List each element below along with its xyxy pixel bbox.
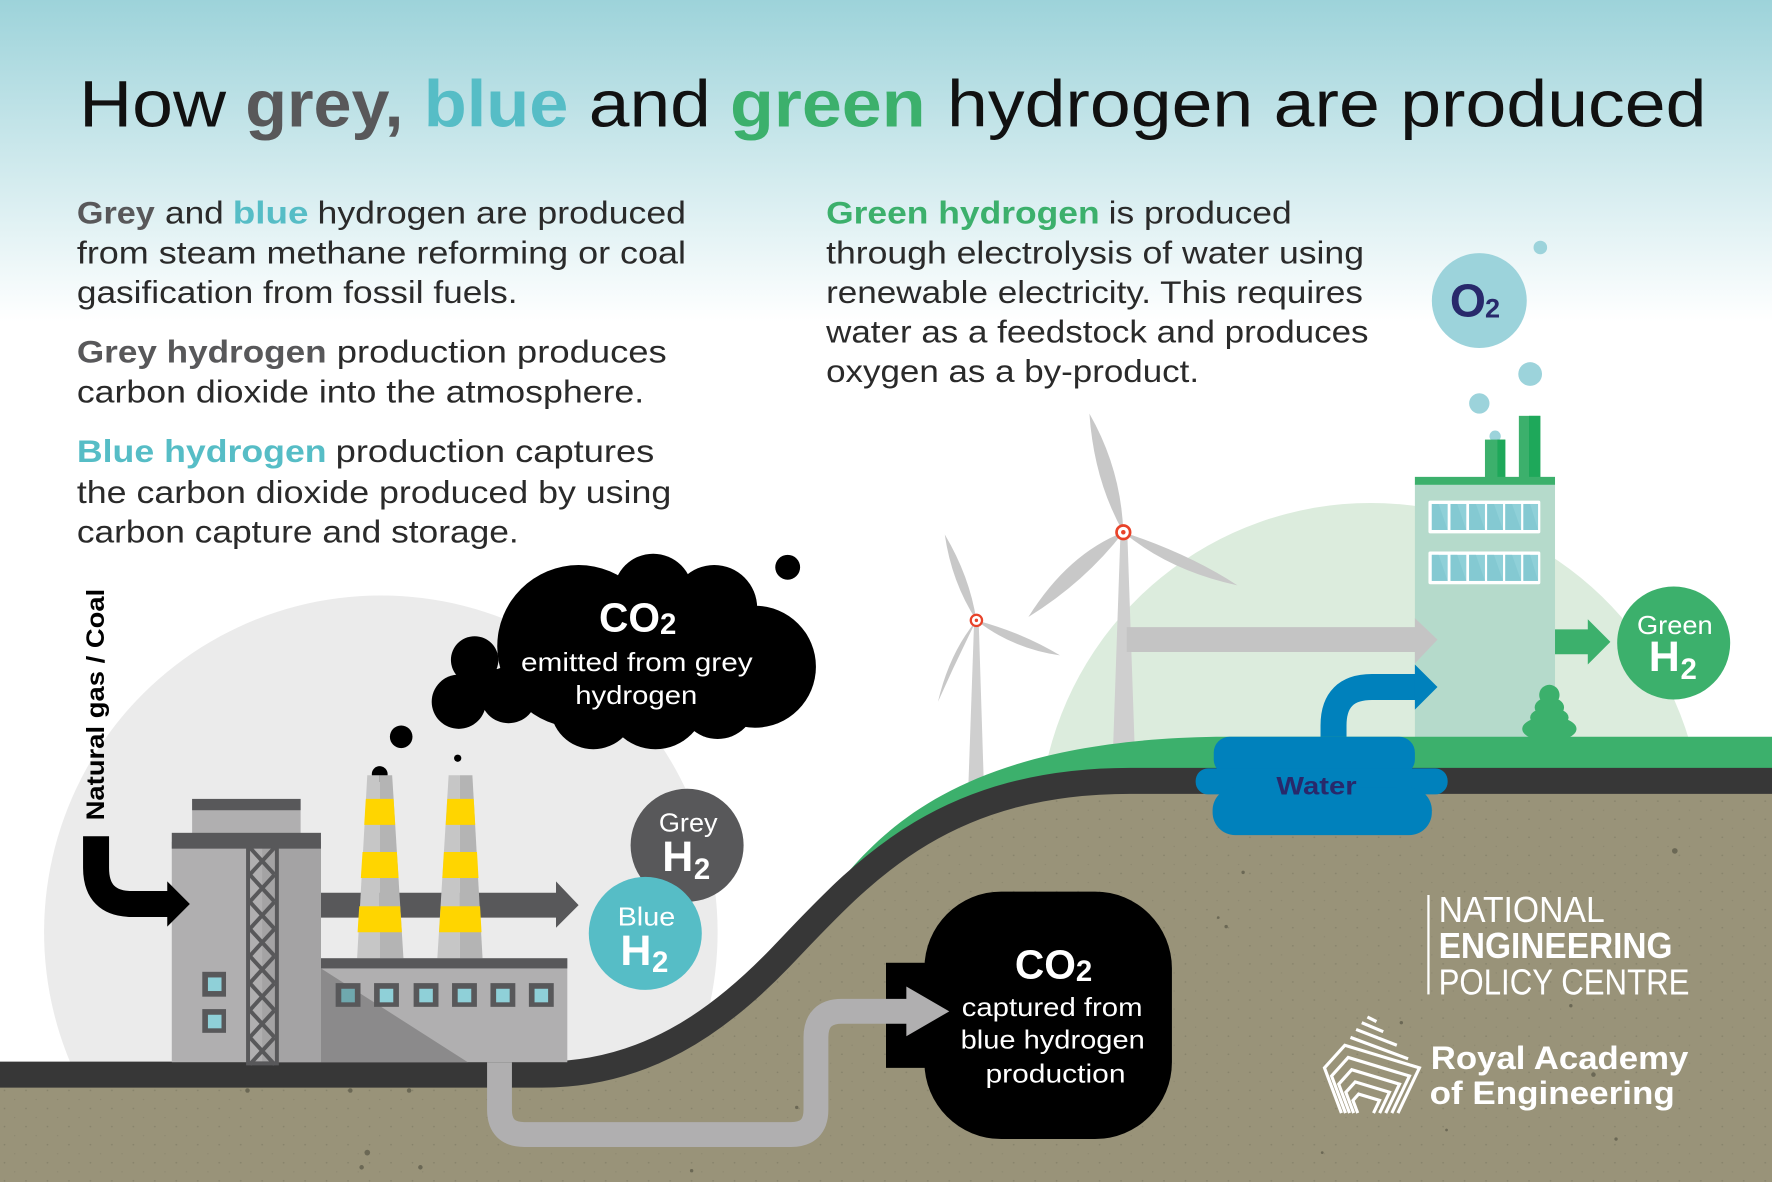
text block: grey and blue hydrogen overview: Grey: [77, 195, 155, 231]
tank label: production: [985, 1059, 1126, 1089]
text block: grey hydrogen: Grey hydrogen: [77, 334, 327, 370]
backdrop circle: green plant: [1045, 503, 1696, 768]
text block: grey and blue hydrogen overview: blue: [233, 195, 309, 231]
title: green: [730, 68, 926, 141]
CO2 storage tank: [886, 892, 1172, 1139]
O2 bubble: [1432, 253, 1527, 348]
title: grey,: [245, 68, 403, 141]
wind turbine: small: [938, 534, 1060, 782]
text block: blue hydrogen: Blue hydrogen: [77, 433, 327, 469]
arrow: hydrogen output: [321, 881, 579, 928]
CO2 emissions cloud: 2: [660, 608, 676, 641]
ground: [0, 781, 1772, 1182]
oxygen bubbles: [1469, 241, 1547, 442]
logo: National Engineering Policy Centre: NATIONAL: [1439, 889, 1605, 930]
blue H2 badge: H: [620, 927, 651, 975]
arrow: green hydrogen output: [1555, 619, 1610, 664]
tank label: blue hydrogen: [961, 1025, 1145, 1055]
text block: grey hydrogen: carbon dioxide into the atmosphere.: [77, 373, 644, 409]
text block: green hydrogen: renewable electricity. This requires: [826, 274, 1363, 310]
lattice: [248, 848, 277, 1064]
feedstock label: Natural gas / Coal: [82, 589, 110, 820]
logo: Royal Academy of Engineering: Royal Academy: [1431, 1039, 1689, 1076]
logo: Royal Academy of Engineering: [1324, 1017, 1689, 1113]
chimney: left: [357, 775, 403, 958]
text block: grey and blue hydrogen overview: [77, 195, 686, 310]
wind turbine: large: [1028, 414, 1237, 746]
text block: blue hydrogen: carbon capture and storage.: [77, 513, 519, 549]
electrolysis building: [1415, 416, 1555, 739]
title: blue: [424, 68, 568, 141]
grey H2 badge: Grey: [659, 808, 718, 838]
title: and: [589, 68, 711, 141]
text block: grey hydrogen: [77, 334, 667, 409]
text block: green hydrogen: through electrolysis of water using: [826, 234, 1364, 270]
text block: blue hydrogen: [77, 433, 671, 549]
green grass strip: [850, 737, 1772, 870]
text block: grey hydrogen: production produces: [337, 334, 667, 370]
factory: lower building: [321, 958, 567, 1062]
O2 bubble: O: [1450, 274, 1486, 326]
title: [79, 68, 1706, 141]
arrow: water into plant: [1334, 687, 1417, 741]
logo mark: [1324, 1017, 1419, 1113]
green H2 badge: 2: [1680, 653, 1697, 686]
O2 bubble: 2: [1485, 293, 1500, 324]
logo: National Engineering Policy Centre: POLICY CENTRE: [1439, 961, 1690, 1002]
arrow: renewable electricity: [1127, 618, 1437, 663]
pipe: captured CO2: [500, 987, 949, 1135]
text block: green hydrogen: Green hydrogen: [826, 195, 1100, 231]
text block: blue hydrogen: the carbon dioxide produced by using: [77, 474, 671, 510]
green H2 badge: [1617, 586, 1730, 699]
arrow: natural gas / coal feed: [96, 836, 190, 927]
grey H2 badge: H: [662, 833, 693, 881]
green H2 badge: Green: [1637, 610, 1713, 640]
blue H2 badge: 2: [652, 946, 668, 979]
green H2 badge: H: [1649, 633, 1680, 681]
road layer: [0, 781, 1772, 1075]
text block: grey and blue hydrogen overview: gasification from fossil fuels.: [77, 274, 518, 310]
tank label: captured from: [962, 992, 1143, 1022]
emission dots: [372, 555, 800, 782]
blue H2 badge: [589, 877, 702, 990]
sky gradient background: [0, 0, 1772, 322]
text block: green hydrogen: [825, 195, 1369, 389]
text block: grey and blue hydrogen overview: from steam methane reforming or coal: [77, 234, 686, 270]
logo: National Engineering Policy Centre: ENGINEERING: [1439, 925, 1673, 966]
title: How: [79, 68, 227, 141]
text block: blue hydrogen: production captures: [336, 433, 654, 469]
logo: Royal Academy of Engineering: of Engineering: [1430, 1074, 1675, 1111]
text block: grey and blue hydrogen overview: and: [165, 195, 224, 231]
arrow head: water: [1415, 664, 1437, 710]
bush: [1522, 685, 1576, 741]
tank label: CO: [1015, 942, 1076, 988]
blue H2 badge: Blue: [618, 901, 675, 931]
CO2 emissions cloud: hydrogen: [575, 680, 697, 710]
grey H2 badge: 2: [694, 853, 710, 886]
backdrop circle: grey factory: [44, 595, 718, 1074]
CO2 emissions cloud: CO: [599, 595, 660, 641]
title: hydrogen are produced: [947, 68, 1706, 141]
CO2 emissions cloud: emitted from grey: [521, 647, 753, 677]
text block: grey and blue hydrogen overview: hydrogen are produced: [318, 195, 686, 231]
text block: green hydrogen: is produced: [1109, 195, 1292, 231]
water reservoir: Water: [1276, 772, 1357, 800]
text block: green hydrogen: oxygen as a by-product.: [826, 353, 1199, 389]
ground larger dots: [245, 848, 1678, 1172]
CO2 emissions cloud: [432, 554, 816, 749]
tank label: [961, 942, 1145, 1089]
chimney: right: [437, 775, 483, 958]
grey H2 badge: [631, 789, 744, 902]
tank label: 2: [1076, 955, 1092, 988]
logo: National Engineering Policy Centre: [1427, 889, 1690, 1002]
water reservoir: [1196, 737, 1448, 835]
text block: green hydrogen: water as a feedstock and produces: [825, 313, 1369, 349]
factory: tower: [172, 799, 321, 1064]
ground speckle: [0, 792, 1772, 1182]
